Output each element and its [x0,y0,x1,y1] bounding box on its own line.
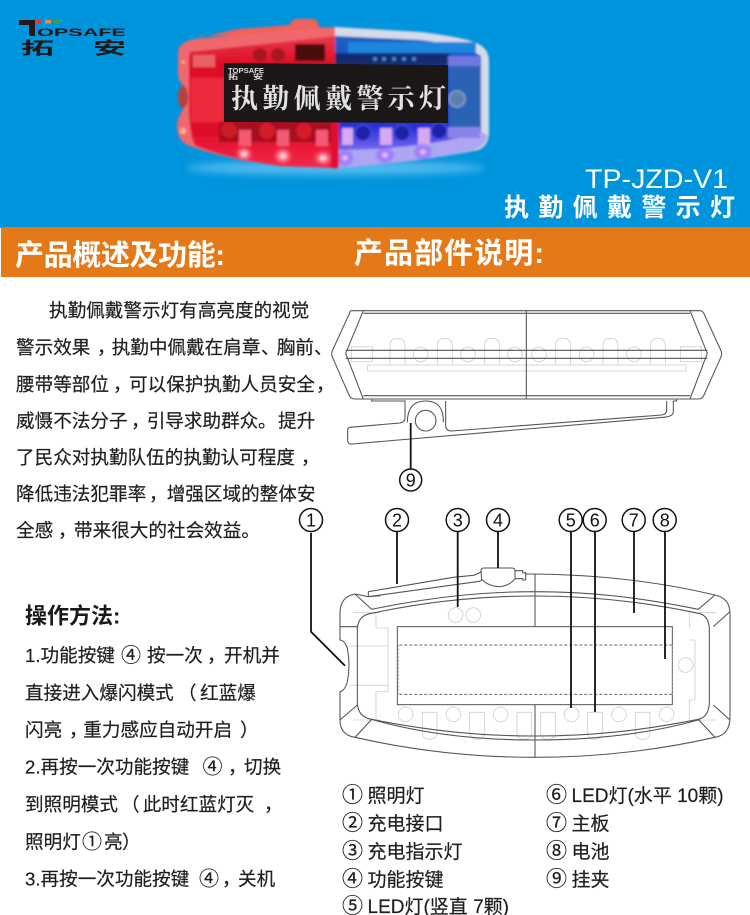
overview paragraph: 腰带等部位 [16,374,109,395]
header background [0,0,750,228]
parts legend: 电池 [572,841,610,863]
operation steps: 2.再按一次功能按键 [25,757,189,778]
small logo on label: 拓 [228,72,238,81]
leader and callout 9 [400,423,422,491]
operation steps: 关机 [238,868,276,889]
operation steps: ④ [202,756,222,779]
overview paragraph: 。 [258,410,277,432]
operation steps: 1.功能按键 [25,645,115,666]
parts legend: ⑨ [546,868,567,891]
operation steps: （ [178,682,197,703]
operation steps: 切换 [244,757,282,778]
operation steps: ） [240,719,259,740]
operation steps: ） [122,831,141,852]
operation steps: （ [121,794,140,815]
operation steps: 到照明模式 [25,794,118,815]
parts legend: 充电接口 [368,813,444,835]
operation steps: 此时红蓝灯灭 [143,794,255,815]
overview paragraph [16,300,335,541]
parts legend: 挂夹 [572,869,610,891]
parts legend: 充电指示灯 [368,841,463,863]
operation steps: ， [264,794,283,815]
operation steps: 照明灯 [25,831,81,852]
lower lavender band [335,132,488,168]
operation heading: 操作方法: [25,604,120,628]
parts legend: ④ [342,868,363,891]
red LEDs [239,130,328,146]
parts legend: ⑦ [546,812,567,835]
operation steps [25,644,283,890]
small logo on label: TOPSAFE [228,68,264,75]
blue section [335,36,481,166]
parts legend: 照明灯 [368,785,425,807]
operation steps: ④ [199,867,219,890]
overview paragraph: ， [149,484,168,504]
numbered callouts and leaders: 2 [392,510,402,530]
overview paragraph: 提升 [278,410,315,432]
operation steps: 按一次 [147,645,203,666]
button side nub [178,86,188,108]
overview paragraph: 带来很大的社会效益。 [74,520,260,541]
body outline [340,574,730,757]
charging port and button [368,568,526,597]
logo: Topsafe: OPSAFE [37,27,126,39]
heading: parts: 产品部件说明: [354,237,544,270]
red upper parts [295,44,325,61]
operation steps: ① [82,830,102,853]
overview paragraph: 执勤中佩戴在肩章 [112,337,260,358]
operation steps: ， [222,868,241,889]
diagram: side view with clip [332,311,722,444]
overview paragraph: 可以保护执勤人员安全 [129,374,315,395]
diagram: front view [340,568,730,757]
dark strip [335,53,450,65]
operation steps: 开机并 [224,645,280,666]
indicator dots [373,57,416,61]
operation steps: ， [207,645,226,666]
overview paragraph: ， [113,374,132,395]
overview paragraph: 、 [261,337,280,358]
logo: Topsafe: 安 [93,39,126,58]
reflection glow [185,161,485,175]
operation steps: 闪亮 [25,719,62,740]
faint internals [350,608,717,739]
overview paragraph: 威慑不法分子 [16,410,128,432]
operation steps: ， [69,719,88,740]
red lower row [219,122,335,142]
overview paragraph: 降低违法犯罪率 [16,484,146,504]
parts legend: ② [342,812,363,835]
numbered callouts and leaders: 4 [493,510,503,530]
overview paragraph: ， [316,374,335,395]
parts legend: ⑧ [546,840,567,863]
overview paragraph: 胸前 [277,337,314,358]
small logo on label: 安 [253,72,263,81]
overview paragraph: 全感 [16,520,53,541]
overview paragraph: 警示效果 [16,337,90,358]
logo: Topsafe [19,20,126,58]
logo: Topsafe: 拓 [21,39,54,58]
parts legend: ⑥ [546,784,567,807]
overview paragraph: ， [131,410,150,432]
housing outline [332,311,722,399]
blue lower circles [355,123,447,141]
white upper rim of blue section [335,27,489,168]
numbered callouts and leaders: 8 [660,510,670,530]
overview paragraph: 了民众对执勤队伍的执勤认可程度 [16,447,295,468]
parts legend: 主板 [572,813,610,835]
overview paragraph: 增强区域的整体安 [167,484,315,504]
product name: 执勤佩戴警示灯 [504,194,735,222]
red section [189,36,336,168]
product photo: warning light [177,19,489,175]
leader and callout 9: 9 [406,470,416,490]
operation steps: 亮 [104,831,123,852]
heading band [1,227,750,277]
numbered callouts and leaders: 3 [453,510,463,530]
overview paragraph: ， [97,337,116,358]
right module [449,66,481,128]
black label [224,63,448,123]
blue LEDs [342,128,430,145]
parts legend: ③ [342,840,363,863]
operation steps: 红蓝爆 [200,682,256,703]
numbered callouts and leaders: 5 [566,510,576,530]
overview paragraph: 、 [314,337,333,358]
operation steps: 3.再按一次功能按键 [25,868,189,889]
overview paragraph: 执勤佩戴警示灯有高亮度的视觉 [49,300,309,321]
parts legend: LED灯(水平 10颗) [572,785,724,807]
operation steps: ④ [121,644,141,667]
numbered callouts and leaders [300,508,676,712]
operation steps: 重力感应自动开启 [83,719,232,740]
clip top and button [198,19,336,38]
clip [348,399,677,444]
label text: 执勤佩戴警示灯 [231,77,446,116]
operation steps: 直接进入爆闪模式 [25,682,174,703]
overview paragraph: ， [301,447,320,468]
faint LED outlines [352,338,701,371]
battery area [397,627,672,705]
parts legend [342,784,724,915]
parts legend: 功能按键 [368,869,444,891]
overview paragraph: 引导求助群众 [147,410,258,432]
model number: TP-JZD-V1 [585,164,728,194]
heading: overview: 产品概述及功能: [15,239,225,272]
overview paragraph: ， [58,520,77,541]
red left panel [191,78,224,122]
blue window [348,42,476,53]
parts legend: ① [342,784,363,807]
operation steps: ， [228,757,247,778]
housing [177,27,489,168]
numbered callouts and leaders: 7 [629,510,639,530]
numbered callouts and leaders: 6 [590,510,600,530]
numbered callouts and leaders: 1 [306,510,316,530]
red LED on seam [331,122,339,168]
small logo on label [228,68,264,81]
